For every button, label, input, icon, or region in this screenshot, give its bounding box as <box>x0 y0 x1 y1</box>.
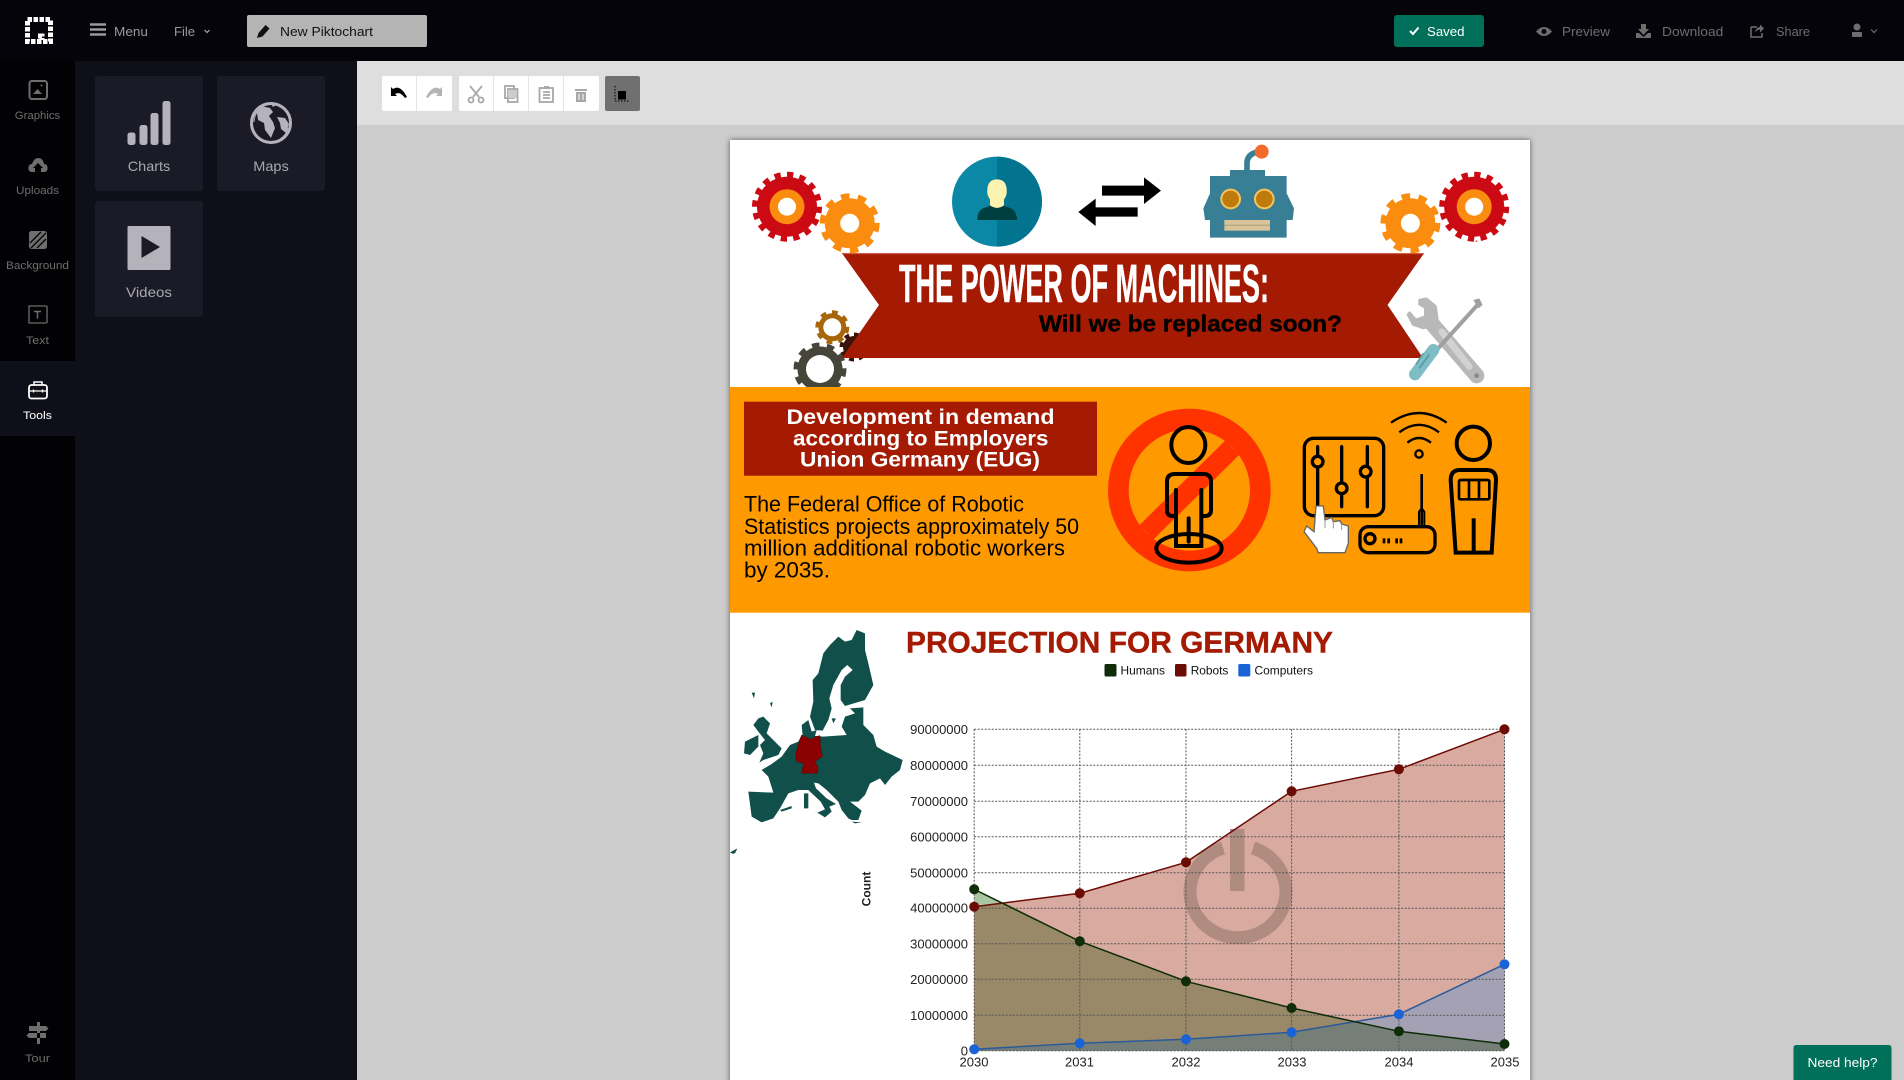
map: Europe with Germany highlighted <box>730 630 903 854</box>
series: computers <box>969 959 1510 1054</box>
icon: robot <box>1203 145 1294 238</box>
chart legend: Robots <box>1191 664 1228 678</box>
preview action <box>1536 24 1611 39</box>
callout heading: Union Germany (EUG) <box>800 449 1040 472</box>
callout heading: Development in demand <box>786 406 1054 429</box>
series: robots <box>969 724 1510 912</box>
editing toolbar <box>357 61 1904 125</box>
area chart: projection <box>860 722 1519 1070</box>
tool card: maps: Maps <box>253 158 289 174</box>
callout heading: according to Employers <box>793 428 1048 451</box>
heading: projection for Germany: PROJECTION FOR GERMANY <box>906 627 1333 660</box>
y axis labels: 60000000 <box>910 830 968 844</box>
sidebar item: tools: Tools <box>23 410 53 422</box>
icon: router with wifi <box>1360 413 1447 553</box>
tool card: charts <box>95 76 203 191</box>
tool card: charts: Charts <box>128 158 170 174</box>
tool card: maps <box>217 76 325 191</box>
x axis labels: 2033 <box>1278 1054 1306 1070</box>
body text: The Federal Office of Robotic <box>744 492 1024 517</box>
left icon sidebar <box>0 61 75 1080</box>
chart legend: Computers <box>1254 664 1313 678</box>
y axis labels: 10000000 <box>910 1008 968 1023</box>
tool card: videos <box>95 201 203 317</box>
y axis title: Count <box>860 872 874 906</box>
preview action: Preview <box>1562 24 1611 39</box>
sidebar item: tour <box>25 1022 50 1065</box>
align button <box>605 76 640 111</box>
infographic card <box>730 140 1530 1080</box>
undo and redo buttons <box>382 76 452 111</box>
saved button: Saved <box>1427 24 1464 39</box>
menu button <box>90 24 148 39</box>
x axis labels: 2034 <box>1385 1054 1413 1070</box>
chart legend: Humans <box>1120 664 1165 678</box>
sidebar item: tools <box>23 382 53 422</box>
y axis labels: 80000000 <box>910 758 968 773</box>
subtitle: Will we be replaced soon? <box>1039 310 1342 336</box>
sidebar item: graphics: Graphics <box>15 110 61 122</box>
share action <box>1751 24 1810 39</box>
sidebar item: background: Background <box>6 260 69 272</box>
download action: Download <box>1662 24 1723 39</box>
body text: Statistics projects approximately 50 <box>744 514 1079 539</box>
icon: hand cursor <box>1304 506 1348 553</box>
icon: small dark gear behind banner <box>842 335 866 359</box>
help button: Need help? <box>1808 1055 1878 1070</box>
saved button <box>1394 15 1484 47</box>
y axis labels: 50000000 <box>910 866 968 880</box>
x axis labels: 2035 <box>1491 1054 1519 1070</box>
series: humans <box>969 884 1510 1049</box>
icon: wrench and screwdriver <box>1406 297 1483 378</box>
title field: New Piktochart <box>280 24 373 39</box>
Germany <box>796 735 823 773</box>
file menu: File <box>174 24 195 39</box>
icon: left orange gear <box>823 196 877 250</box>
icon: brown gear <box>817 312 847 342</box>
icon: dark gear <box>796 345 844 393</box>
y axis labels: 70000000 <box>910 794 968 809</box>
x axis labels <box>960 1054 1519 1070</box>
icon: no humans sign <box>1118 419 1260 563</box>
icon: right red gear <box>1442 175 1506 239</box>
y axis labels: 30000000 <box>910 936 968 952</box>
file menu <box>174 24 210 39</box>
icon: logo <box>28 20 50 42</box>
tools panel <box>75 61 357 1080</box>
icon: slider panel <box>1304 438 1384 516</box>
sidebar item: text <box>26 306 49 347</box>
title: THE POWER OF MACHINES: <box>899 254 1269 314</box>
title field <box>247 15 427 47</box>
sidebar item: tour: Tour <box>25 1053 50 1065</box>
sidebar item: uploads <box>16 158 60 197</box>
y axis labels: 20000000 <box>910 972 968 987</box>
user menu <box>1852 24 1877 37</box>
x axis labels: 2031 <box>1065 1054 1094 1070</box>
watermark: power icon <box>1190 829 1286 938</box>
sidebar item: graphics <box>15 81 61 122</box>
top navigation bar <box>0 0 1904 61</box>
x axis labels: 2030 <box>960 1054 988 1070</box>
y axis labels <box>910 722 968 1058</box>
sidebar item: uploads: Uploads <box>16 185 60 197</box>
body text: million additional robotic workers <box>744 536 1065 561</box>
share action: Share <box>1776 24 1810 39</box>
download action <box>1636 24 1723 39</box>
icon: worker figure <box>1451 427 1496 553</box>
title banner <box>842 253 1424 358</box>
icon: left red gear <box>755 175 819 239</box>
clipboard buttons <box>459 76 599 111</box>
icon: human avatar <box>952 157 1042 247</box>
y axis labels: 40000000 <box>910 900 968 916</box>
x axis labels: 2032 <box>1172 1054 1200 1070</box>
arrows: exchange <box>1078 177 1161 226</box>
body text <box>744 492 1079 583</box>
callout heading <box>744 402 1097 476</box>
panel: development in demand <box>730 387 1530 613</box>
tool card: videos: Videos <box>126 284 172 300</box>
y axis labels: 0 <box>961 1044 968 1058</box>
body text: by 2035. <box>744 558 830 583</box>
canvas background <box>357 125 1904 1080</box>
y axis labels: 90000000 <box>910 722 968 737</box>
help button <box>1794 1045 1892 1080</box>
icon: right orange gear <box>1383 196 1437 250</box>
sidebar item: background <box>6 231 69 272</box>
chart legend <box>1104 664 1313 678</box>
menu button: Menu <box>114 24 148 39</box>
sidebar item: text: Text <box>26 335 49 347</box>
